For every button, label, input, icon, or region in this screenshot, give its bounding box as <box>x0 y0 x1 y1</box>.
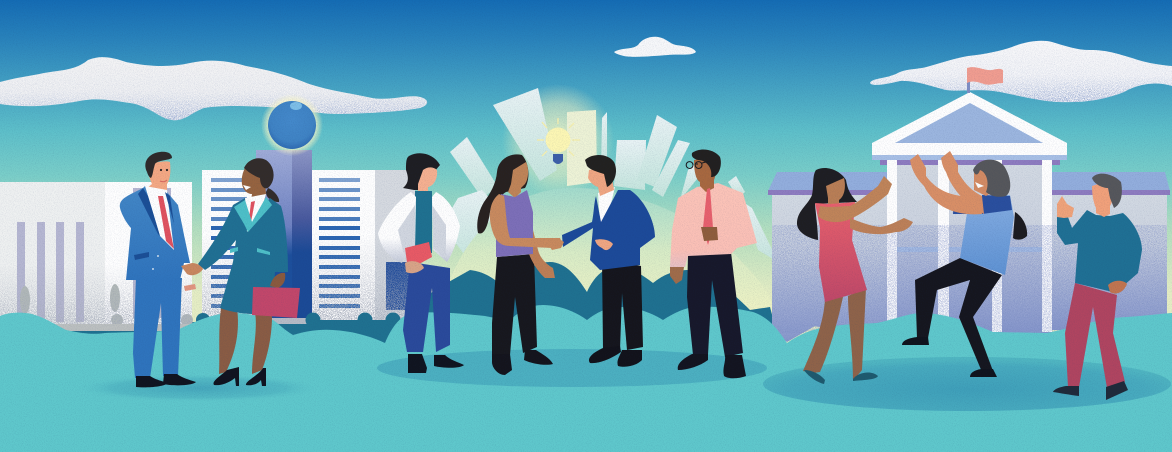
ground hills <box>0 305 1172 452</box>
window stripes <box>211 178 360 308</box>
jacket and skirt <box>198 198 288 316</box>
clasped hands <box>181 263 203 275</box>
purple roof bands <box>768 160 1170 195</box>
neck and face <box>242 167 266 207</box>
face and neck <box>508 162 528 198</box>
globe halo <box>261 94 323 156</box>
blue windows <box>386 262 416 310</box>
red briefcase <box>252 287 300 318</box>
dress <box>815 202 867 302</box>
centre wall <box>887 160 1052 333</box>
left wing wall <box>772 192 887 342</box>
hair <box>585 155 616 187</box>
trousers <box>687 252 743 357</box>
building: government hall with columns <box>768 67 1170 342</box>
base and bushes <box>196 312 415 332</box>
person: dancing person in blue tee <box>902 151 1027 377</box>
blue globe <box>268 101 316 149</box>
purple top <box>496 190 533 257</box>
lowered hand <box>670 267 684 284</box>
lower arm <box>850 218 913 234</box>
hair <box>1092 174 1122 208</box>
raised arms <box>910 151 984 214</box>
shoes <box>492 350 553 375</box>
coat inner grey <box>398 205 446 258</box>
skyline towers <box>442 88 778 262</box>
shoes <box>408 354 464 373</box>
face and neck <box>694 156 716 192</box>
shoes <box>1053 381 1128 400</box>
right wing wall <box>1052 192 1167 330</box>
right office wing <box>312 170 375 322</box>
pocket <box>134 252 149 260</box>
cloud: small centre <box>614 37 696 57</box>
smile <box>975 182 984 188</box>
shoes <box>678 354 746 378</box>
glasses <box>686 161 710 168</box>
glow behind light bulb <box>502 84 614 196</box>
face and neck <box>418 167 437 194</box>
black trousers <box>915 258 1002 372</box>
ponytail <box>1013 212 1027 240</box>
hand at tie <box>701 227 718 241</box>
blue tee <box>953 195 1014 275</box>
trousers <box>133 278 182 378</box>
face <box>974 166 996 196</box>
light bulb <box>537 118 580 164</box>
ponytail <box>266 188 279 202</box>
wing roofs <box>768 172 1170 191</box>
shoes <box>804 370 878 384</box>
lapels <box>138 188 174 236</box>
ground shadow: left pair <box>73 374 323 402</box>
pediment triangle <box>895 103 1043 143</box>
columns <box>17 188 171 322</box>
ground shadow: right group <box>763 357 1171 411</box>
person: businesswoman in teal suit <box>198 158 300 386</box>
red folder <box>405 242 432 270</box>
shirt <box>145 186 176 252</box>
globe highlight <box>290 102 302 110</box>
person: man in teal sweater <box>1053 174 1142 400</box>
face and neck <box>1092 180 1113 217</box>
person: man in pink shirt with tie <box>670 150 757 378</box>
high heels <box>213 367 266 386</box>
blouse <box>244 194 266 228</box>
sweater <box>1057 210 1142 293</box>
long hair <box>797 168 857 240</box>
necktie <box>248 201 255 228</box>
white coat left <box>378 192 416 263</box>
city skyline arch with light bulb <box>442 84 778 314</box>
smile <box>243 185 251 190</box>
building: left low block <box>0 182 193 331</box>
hand on hip <box>1108 281 1127 294</box>
hand <box>595 239 613 250</box>
hill dome behind the people <box>446 188 775 314</box>
building: office tower with globe <box>196 94 416 332</box>
hand <box>405 261 424 273</box>
pocket flaps <box>230 247 270 255</box>
hair <box>692 150 721 177</box>
tie <box>703 188 713 245</box>
base <box>0 324 192 331</box>
blush and eye <box>160 169 168 182</box>
shoes <box>589 346 642 367</box>
teal top <box>415 191 432 253</box>
flag <box>967 67 1003 85</box>
collar accent <box>234 197 272 232</box>
navy sleeves <box>953 195 1012 214</box>
face and neck <box>588 166 614 196</box>
legs <box>219 308 272 374</box>
central pillar <box>256 150 312 320</box>
jacket <box>562 190 655 270</box>
trousers <box>403 262 450 352</box>
white pediment roof <box>872 92 1067 155</box>
white shirt <box>598 187 615 224</box>
hair <box>145 152 172 178</box>
lower band <box>897 247 1042 252</box>
second hand under clasp <box>184 284 196 291</box>
upper arm <box>818 176 892 222</box>
trousers <box>1065 283 1125 388</box>
shoes <box>136 374 196 387</box>
jacket <box>120 186 190 280</box>
hair back <box>403 153 440 190</box>
person: woman in purple top <box>477 154 563 375</box>
white columns <box>887 160 1052 332</box>
hair <box>244 158 274 188</box>
long hair <box>477 154 528 234</box>
front arm <box>490 194 563 248</box>
raised hand <box>1057 196 1074 218</box>
ground shadow: centre group <box>377 349 767 387</box>
dark teal hills behind <box>0 262 780 350</box>
left office wing <box>202 170 262 322</box>
cloud: large left <box>0 57 427 120</box>
white coat right <box>432 192 460 262</box>
shoes <box>902 337 997 377</box>
buttons <box>152 255 159 270</box>
trousers <box>602 258 643 350</box>
person: businessman in blue suit <box>120 152 203 387</box>
holding hand <box>270 273 285 288</box>
face and neck <box>826 178 845 206</box>
person: woman in white coat <box>378 153 464 373</box>
back arm <box>529 218 555 278</box>
legs <box>803 288 866 381</box>
grey hair <box>973 160 1010 197</box>
cloud: large right behind flag <box>870 41 1172 102</box>
trousers <box>492 254 537 355</box>
pediment band <box>872 155 1067 160</box>
grey side wall <box>375 170 415 322</box>
pink shirt <box>670 183 757 267</box>
person: man in navy cardigan <box>548 155 655 367</box>
person: woman in red dress <box>797 168 913 384</box>
neck and face <box>147 161 170 198</box>
tie <box>158 196 174 249</box>
trees <box>20 284 193 326</box>
flag pole <box>967 80 970 93</box>
shaking hand <box>548 238 564 250</box>
